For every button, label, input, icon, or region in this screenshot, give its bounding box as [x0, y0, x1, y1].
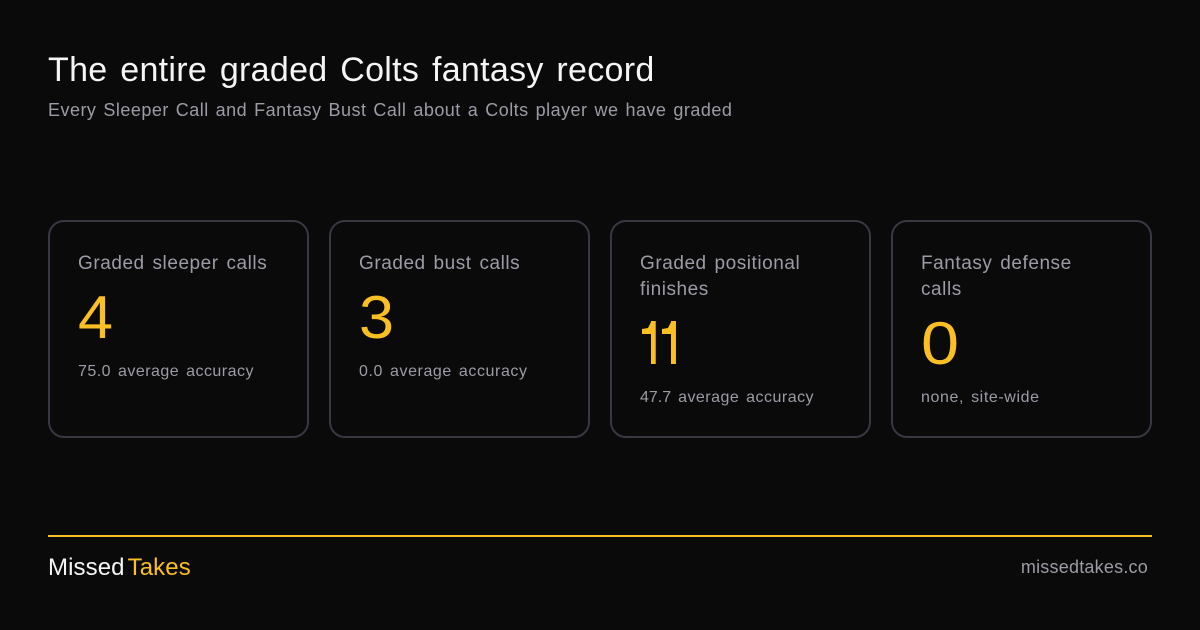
card label: Graded positional: [640, 253, 800, 274]
big number: [642, 321, 676, 364]
big number: 3: [358, 284, 394, 351]
card label: Graded sleeper calls: [78, 253, 267, 274]
subtitle: Every Sleeper Call and Fantasy Bust Call about a Colts player we have graded: [48, 100, 732, 120]
panel: fantasy defense calls: [891, 220, 1152, 438]
card label: finishes: [640, 279, 709, 300]
card note: none, site-wide: [921, 389, 1040, 406]
footer rule: [48, 535, 1152, 537]
card label: calls: [921, 279, 962, 300]
card note: 75.0 average accuracy: [78, 363, 254, 380]
card label: [921, 253, 1072, 300]
card label: Graded bust calls: [359, 253, 520, 274]
title: The entire graded Colts fantasy record: [48, 51, 655, 89]
panel: graded sleeper calls: [48, 220, 309, 438]
panel: graded positional finishes: [610, 220, 871, 438]
site url: missedtakes.co: [1021, 557, 1148, 577]
card label: [640, 253, 800, 300]
big number: 4: [78, 284, 113, 351]
card note: 0.0 average accuracy: [359, 363, 528, 380]
card note: 47.7 average accuracy: [640, 389, 814, 406]
card label: Fantasy defense: [921, 253, 1072, 274]
big number: 0: [920, 310, 959, 377]
panel: graded bust calls: [329, 220, 590, 438]
brand wordmark: MissedTakes: [48, 554, 191, 581]
